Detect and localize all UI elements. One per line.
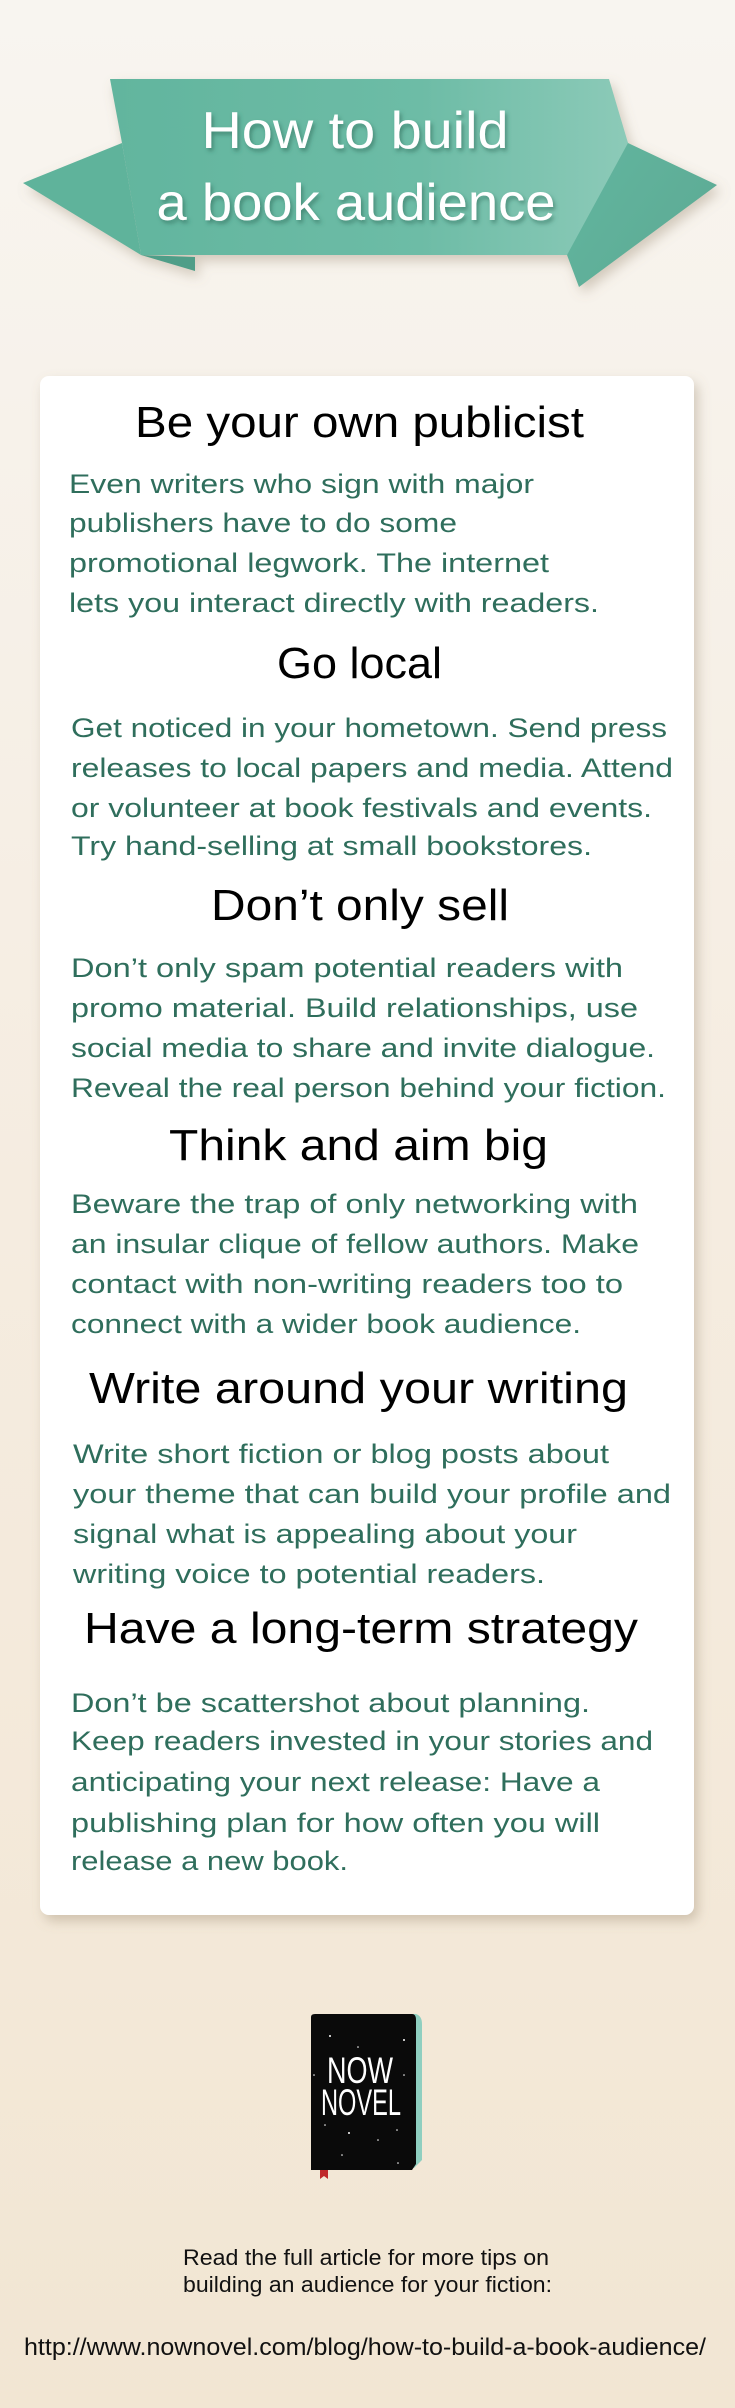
tip 1 body: lets you interact directly with readers. (69, 588, 599, 618)
tip 6 body: publishing plan for how often you will (71, 1808, 600, 1838)
panel: tips card (40, 376, 694, 1915)
tip 5 body (72, 1439, 671, 1589)
tip 5 body: writing voice to potential readers. (72, 1559, 545, 1589)
tip 6 body (71, 1688, 653, 1876)
bookmark (320, 2170, 328, 2179)
tip 5 heading: Write around your writing (89, 1364, 628, 1413)
banner right wing (567, 79, 717, 287)
tip 1 body: publishers have to do some (69, 508, 457, 538)
tip 1 body: Even writers who sign with major (69, 469, 534, 499)
tip 4 body: Beware the trap of only networking with (71, 1189, 638, 1219)
banner main panel (110, 79, 628, 255)
tip 5 body: your theme that can build your profile and (73, 1479, 671, 1509)
tip 6 body: Keep readers invested in your stories and (71, 1726, 653, 1756)
tip 6 body: release a new book. (71, 1846, 348, 1876)
tip 2 body: or volunteer at book festivals and events. (71, 793, 652, 823)
tip 6 heading: Have a long-term strategy (84, 1604, 638, 1653)
tip 3 body (71, 953, 666, 1103)
title text: a book audience (156, 174, 556, 232)
tip 4 body: an insular clique of fellow authors. Make (71, 1229, 639, 1259)
title text (156, 102, 556, 232)
tip 1 body (69, 469, 599, 618)
tip 3 body: promo material. Build relationships, use (71, 993, 638, 1023)
tip 2 body: Try hand-selling at small bookstores. (71, 831, 592, 861)
title text: How to build (202, 102, 508, 160)
banner left wing (23, 143, 141, 255)
tip 2 body: Get noticed in your hometown. Send press (71, 713, 667, 743)
tip 3 body: social media to share and invite dialogue. (71, 1033, 655, 1063)
icon: Now Novel book logo (311, 2014, 422, 2179)
tip 2 heading: Go local (277, 639, 442, 688)
tip 2 body (71, 713, 673, 861)
footer text: Read the full article for more tips on (183, 2245, 549, 2270)
tip 6 body: Don’t be scattershot about planning. (71, 1688, 590, 1718)
tip 6 body: anticipating your next release: Have a (71, 1767, 601, 1797)
tip 1 heading: Be your own publicist (135, 398, 584, 447)
footer text: building an audience for your fiction: (183, 2272, 552, 2297)
tip 4 heading: Think and aim big (169, 1121, 548, 1170)
tip 3 body: Don’t only spam potential readers with (71, 953, 623, 983)
tip 5 body: signal what is appealing about your (73, 1519, 577, 1549)
icon: Now Novel book logo: NOVEL (321, 2082, 401, 2123)
title banner (23, 79, 717, 287)
tip 5 body: Write short fiction or blog posts about (73, 1439, 610, 1469)
tip 3 heading: Don’t only sell (211, 881, 509, 930)
tip 4 body: connect with a wider book audience. (71, 1309, 581, 1339)
tip 1 body: promotional legwork. The internet (69, 548, 550, 578)
tip 2 body: releases to local papers and media. Attend (71, 753, 673, 783)
tip 4 body (71, 1189, 639, 1339)
footer URL: http://www.nownovel.com/blog/how-to-build-a-book-audience/ (24, 2334, 706, 2361)
banner bottom-left flap (141, 255, 195, 271)
icon: Now Novel book logo: NOW (327, 2050, 393, 2091)
tip 4 body: contact with non-writing readers too to (71, 1269, 623, 1299)
tip 3 body: Reveal the real person behind your fiction. (71, 1073, 666, 1103)
footer text (183, 2245, 552, 2297)
